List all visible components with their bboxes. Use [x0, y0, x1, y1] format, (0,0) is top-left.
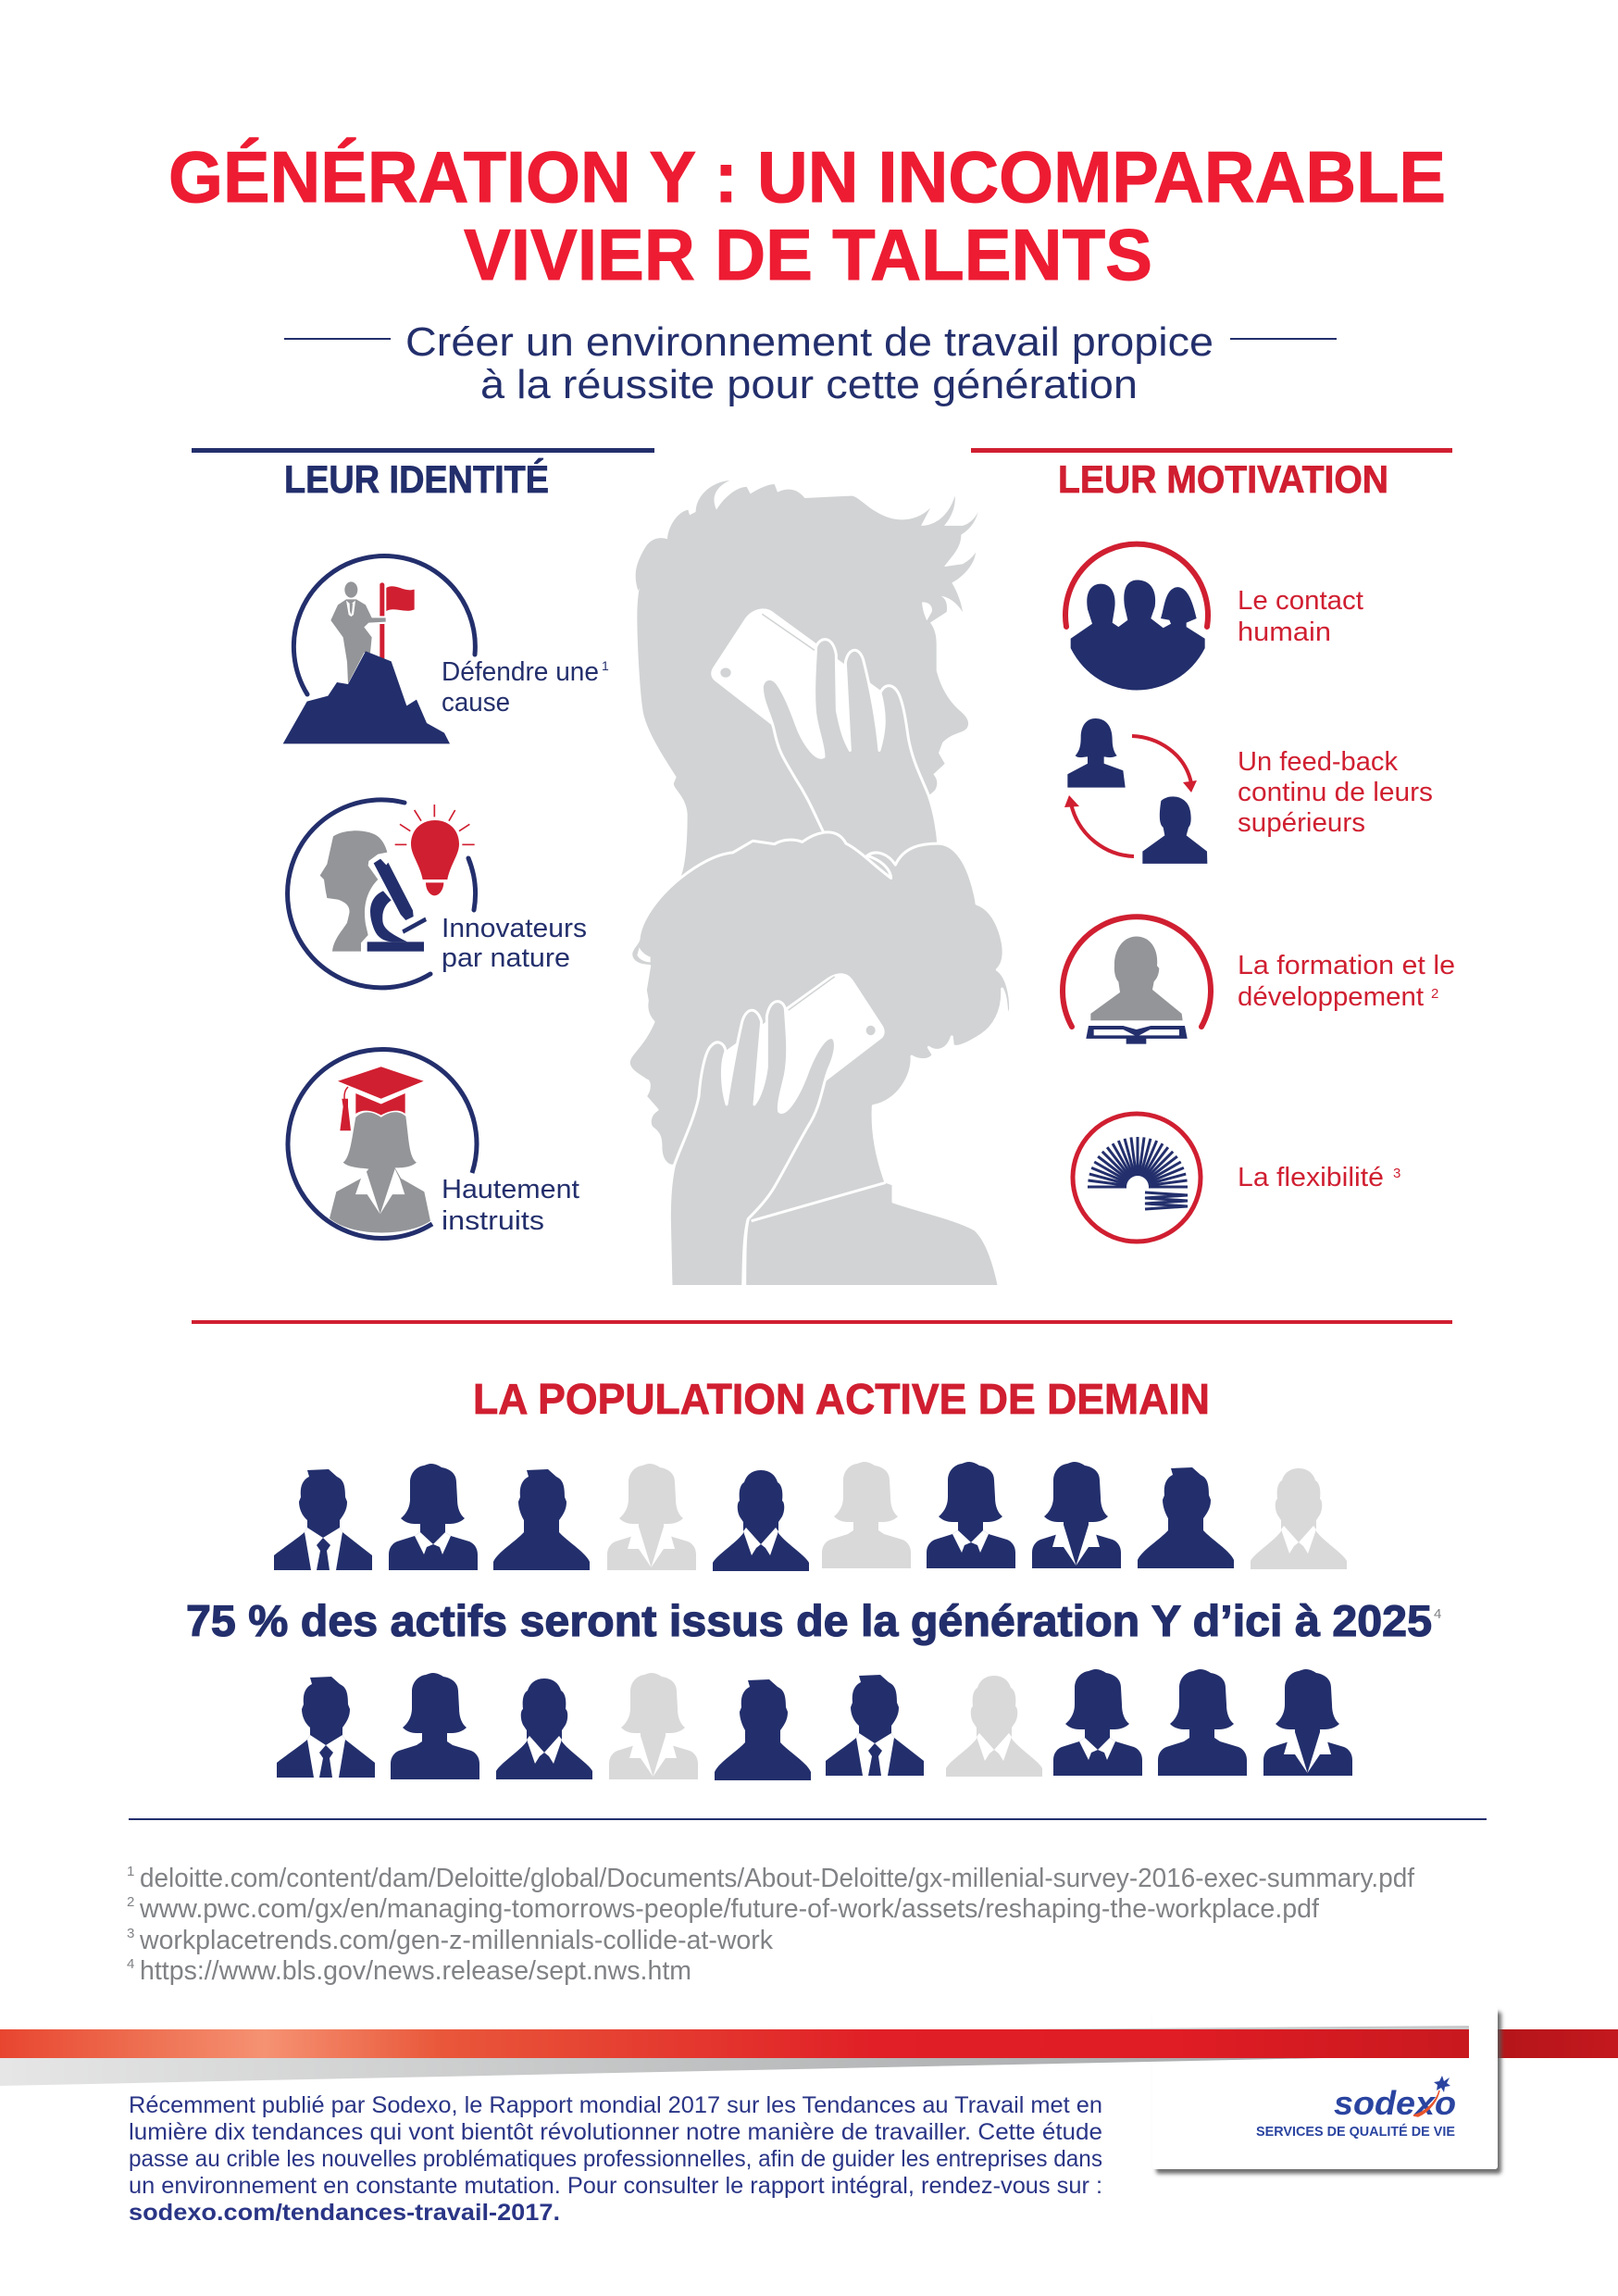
label: défendre une cause: Défendre une — [442, 657, 599, 687]
heading: leur motivation — [971, 448, 1452, 501]
label: la flexibilité: La flexibilité — [1238, 1163, 1384, 1192]
central illustration: two silhouettes on the phone — [629, 480, 1011, 1287]
label: défendre une cause: cause — [442, 688, 510, 718]
silhouette: man with phone — [636, 480, 978, 889]
icon: innovation circle — [288, 800, 476, 988]
silhouette: woman with phone — [629, 832, 1011, 1287]
label: feed-back — [1238, 747, 1433, 838]
subtitle: à la réussite pour cette génération — [480, 362, 1138, 407]
heading: leur identité: LEUR IDENTITÉ — [284, 457, 549, 501]
icon: feedback cycle — [1064, 718, 1207, 864]
footnotes: 2 — [127, 1894, 134, 1910]
footer text: Récemment publié par Sodexo, le Rapport mondial 2017 sur les Tendances au Travail met en — [129, 2092, 1102, 2118]
label: défendre une cause: 1 — [602, 658, 609, 673]
footnotes: https://www.bls.gov/news.release/sept.nws.htm — [140, 1956, 691, 1986]
subtitle — [284, 319, 1337, 407]
label: feed-back: supérieurs — [1238, 808, 1365, 838]
label: formation et développement: La formation et le — [1238, 951, 1455, 980]
title — [168, 136, 1446, 295]
label: feed-back: Un feed-back — [1238, 747, 1398, 777]
subtitle: Créer un environnement de travail propice — [405, 319, 1214, 365]
footnotes: www.pwc.com/gx/en/managing-tomorrows-people/future-of-work/assets/reshaping-the-workplace.pdf — [139, 1894, 1320, 1924]
heading: leur identité — [192, 448, 654, 501]
footnotes: workplacetrends.com/gen-z-millennials-collide-at-work — [139, 1926, 773, 1955]
label: innovateurs par nature — [442, 914, 587, 973]
footer text: un environnement en constante mutation. Pour consulter le rapport intégral, rendez-vous sur : — [129, 2173, 1102, 2199]
footnotes — [127, 1864, 1415, 1986]
icon: flexibility spring — [1073, 1114, 1201, 1242]
label: formation et développement: 2 — [1431, 986, 1438, 1002]
footnotes: 4 — [127, 1956, 134, 1972]
label: hautement instruits: Hautement — [442, 1175, 579, 1204]
logo: sodexo — [1256, 2076, 1456, 2140]
heading: leur motivation: LEUR MOTIVATION — [1058, 457, 1388, 501]
people row 1 — [274, 1462, 1347, 1571]
label: innovateurs par nature: par nature — [442, 943, 570, 973]
label: formation et développement — [1238, 951, 1455, 1012]
footer text: sodexo.com/tendances-travail-2017. — [129, 2200, 560, 2226]
title: VIVIER DE TALENTS — [464, 214, 1152, 295]
footer band and logo card — [0, 2007, 1618, 2169]
heading: la population active de demain: LA POPULATION ACTIVE DE DEMAIN — [473, 1375, 1210, 1423]
statistic: 75 %: 4 — [1434, 1606, 1441, 1622]
footnotes: 1 — [127, 1864, 134, 1879]
label: défendre une cause — [442, 657, 609, 718]
footnotes: 3 — [127, 1926, 134, 1941]
people row 2 — [277, 1669, 1352, 1780]
icon: mountain and flag circle — [283, 555, 475, 743]
label: formation et développement: développement — [1238, 982, 1424, 1012]
logo: sodexo: SERVICES DE QUALITÉ DE VIE — [1256, 2124, 1455, 2140]
label: feed-back: continu de leurs — [1238, 778, 1433, 807]
label: le contact humain: Le contact — [1238, 586, 1363, 616]
label: innovateurs par nature: Innovateurs — [442, 914, 587, 943]
icon: human contact — [1065, 544, 1208, 691]
label: le contact humain: humain — [1238, 618, 1331, 647]
footer text — [129, 2092, 1102, 2226]
label: le contact humain — [1238, 586, 1363, 647]
statistic: 75 %: 75 % des actifs seront issus de la génération Y d’ici à 2025 — [186, 1596, 1432, 1645]
label: hautement instruits: instruits — [442, 1206, 544, 1236]
footer text: passe au crible les nouvelles problématiques professionnelles, afin de guider les entreprises dans — [129, 2146, 1102, 2172]
label: hautement instruits — [442, 1175, 579, 1236]
footnotes: deloitte.com/content/dam/Deloitte/global/Documents/About-Deloitte/gx-millenial-survey-2016-exec-summary.pdf — [140, 1864, 1415, 1893]
icon: training book — [1063, 917, 1211, 1044]
title: GÉNÉRATION Y : UN INCOMPARABLE — [168, 136, 1446, 218]
logo: sodexo: sodexo — [1334, 2084, 1456, 2122]
footer text: lumière dix tendances qui vont bientôt révolutionner notre manière de travailler. Cette étude — [129, 2119, 1102, 2145]
label: la flexibilité: 3 — [1393, 1166, 1400, 1181]
icon: graduate circle — [288, 1049, 477, 1238]
